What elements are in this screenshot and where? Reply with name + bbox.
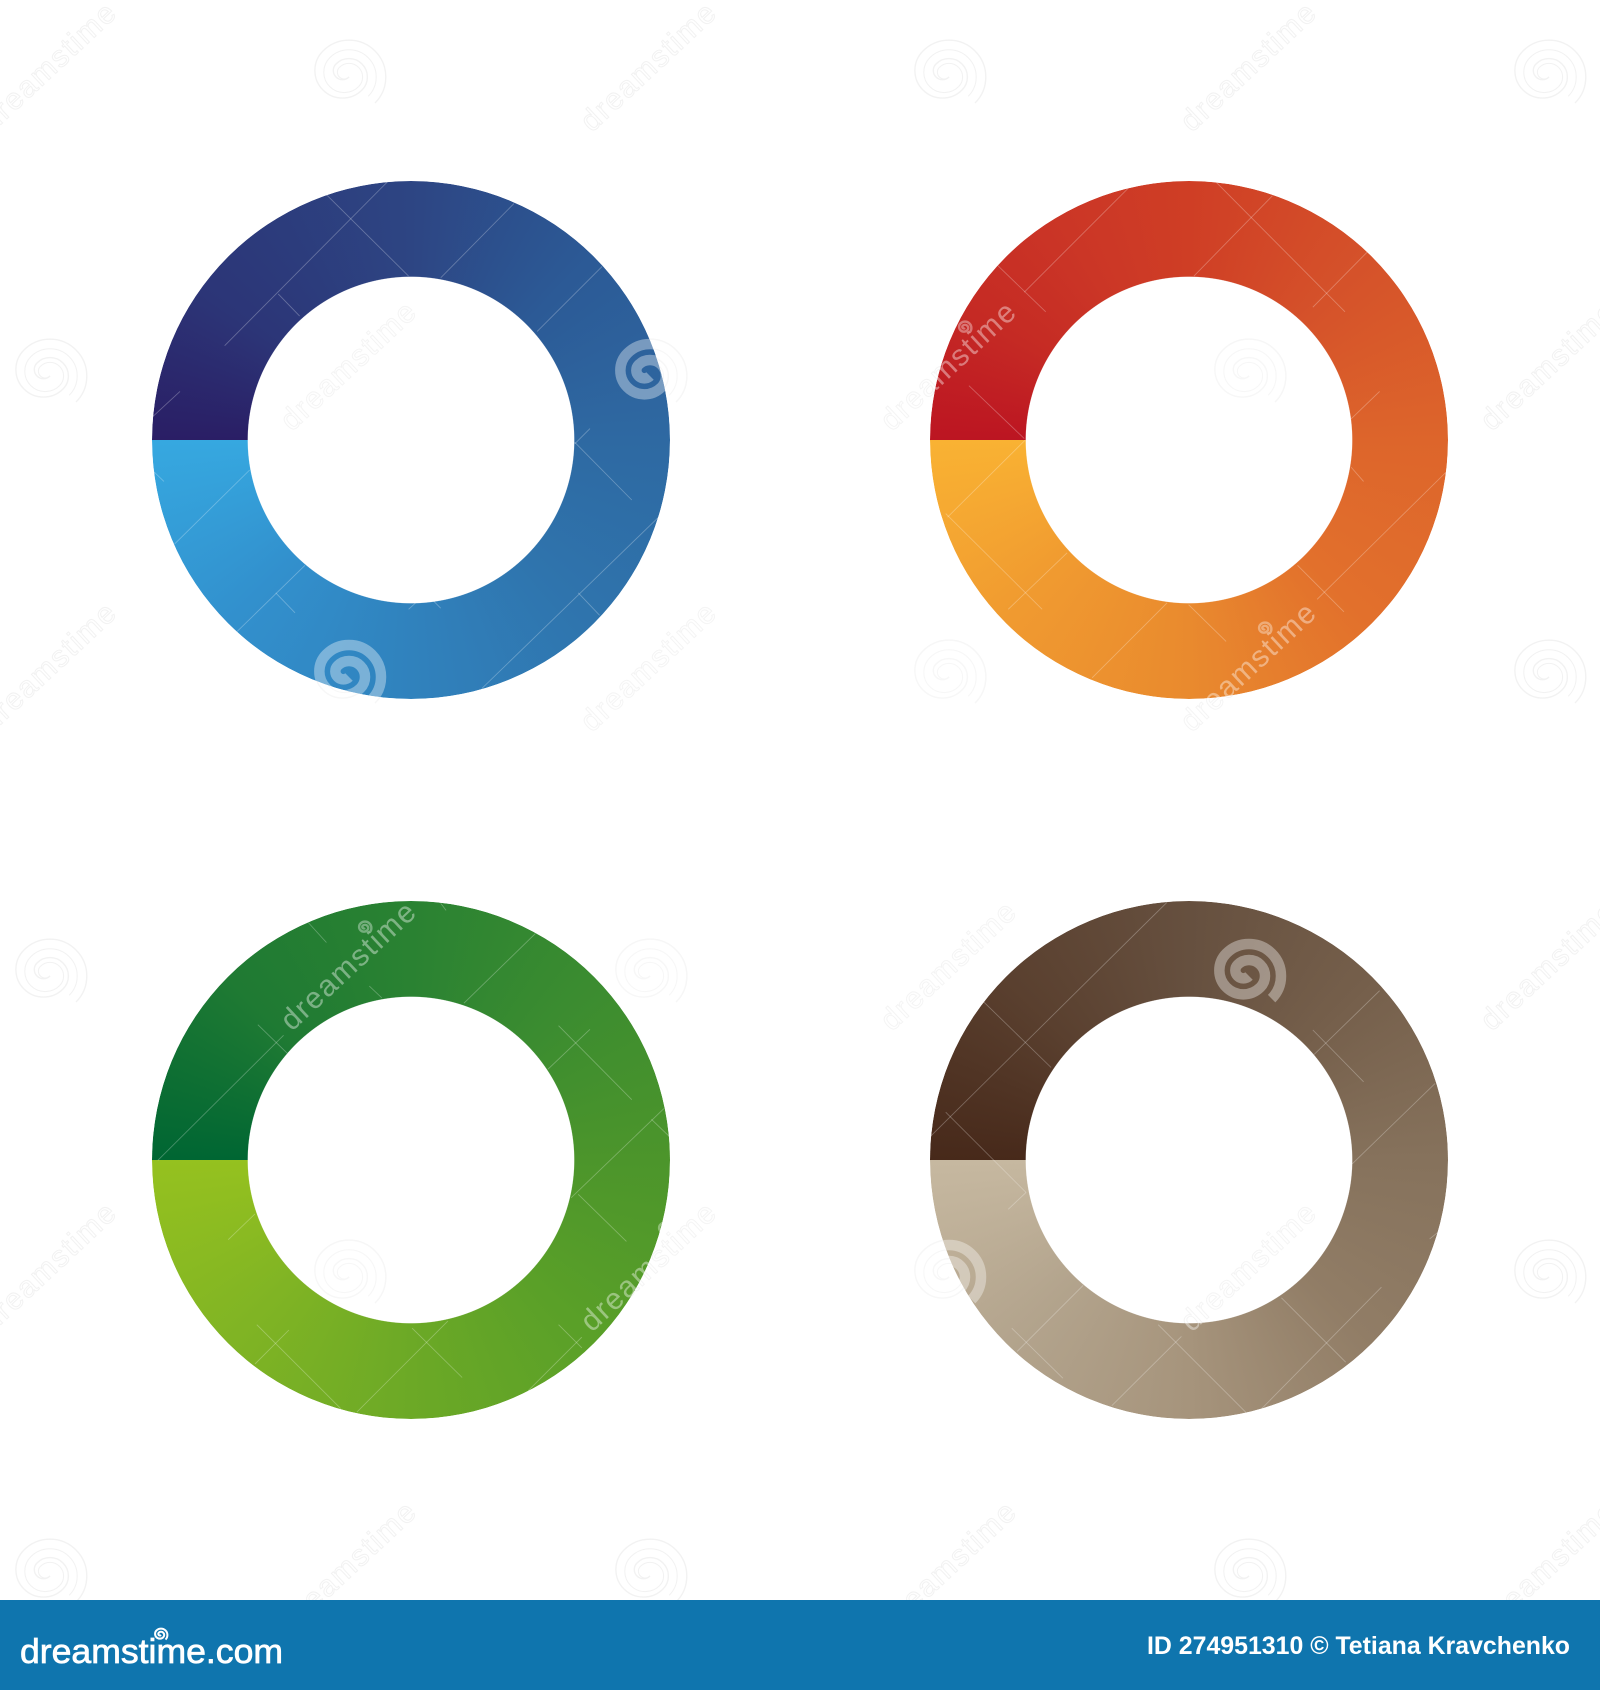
icon: logo spiral [153,1626,170,1643]
faint watermark layer on white: dreamstime [574,1197,722,1338]
watermark overlay on rings: dreamstime [274,896,422,1037]
image id and credit: ID 274951310 © Tetiana Kravchenko [1147,1632,1570,1660]
faint watermark layer on white: dreamstime [574,0,722,138]
faint watermark layer on white: dreamstime [874,296,1022,437]
ring: red-orange gradient [930,180,1448,698]
faint watermark layer on white: dreamstime [874,896,1022,1037]
ring: blue gradient [152,180,670,698]
ring: brown gradient [930,901,1448,1419]
faint watermark layer on white: dreamstime [1174,1197,1322,1338]
faint watermark layer on white: dreamstime [1174,597,1322,738]
ring: green gradient [152,901,670,1419]
faint watermark layer on white: dreamstime [574,597,722,738]
faint watermark layer on white: dreamstime [874,1496,1022,1637]
faint watermark layer on white: dreamstime [1174,0,1322,138]
faint watermark layer on white: dreamstime [274,896,422,1037]
watermark overlay on rings: dreamstime [274,296,422,437]
watermark overlay on rings: dreamstime [574,1197,722,1338]
watermark overlay on rings: dreamstime [874,896,1022,1037]
logo text: dreamstime.com [20,1633,283,1671]
watermark overlay on rings: dreamstime [874,296,1022,437]
faint watermark layer on white: dreamstime [274,1496,422,1637]
watermark overlay on rings: dreamstime [1174,1197,1322,1338]
watermark overlay on rings: dreamstime [1174,597,1322,738]
watermark overlay on rings: dreamstime [574,597,722,738]
faint watermark layer on white: dreamstime [274,296,422,437]
